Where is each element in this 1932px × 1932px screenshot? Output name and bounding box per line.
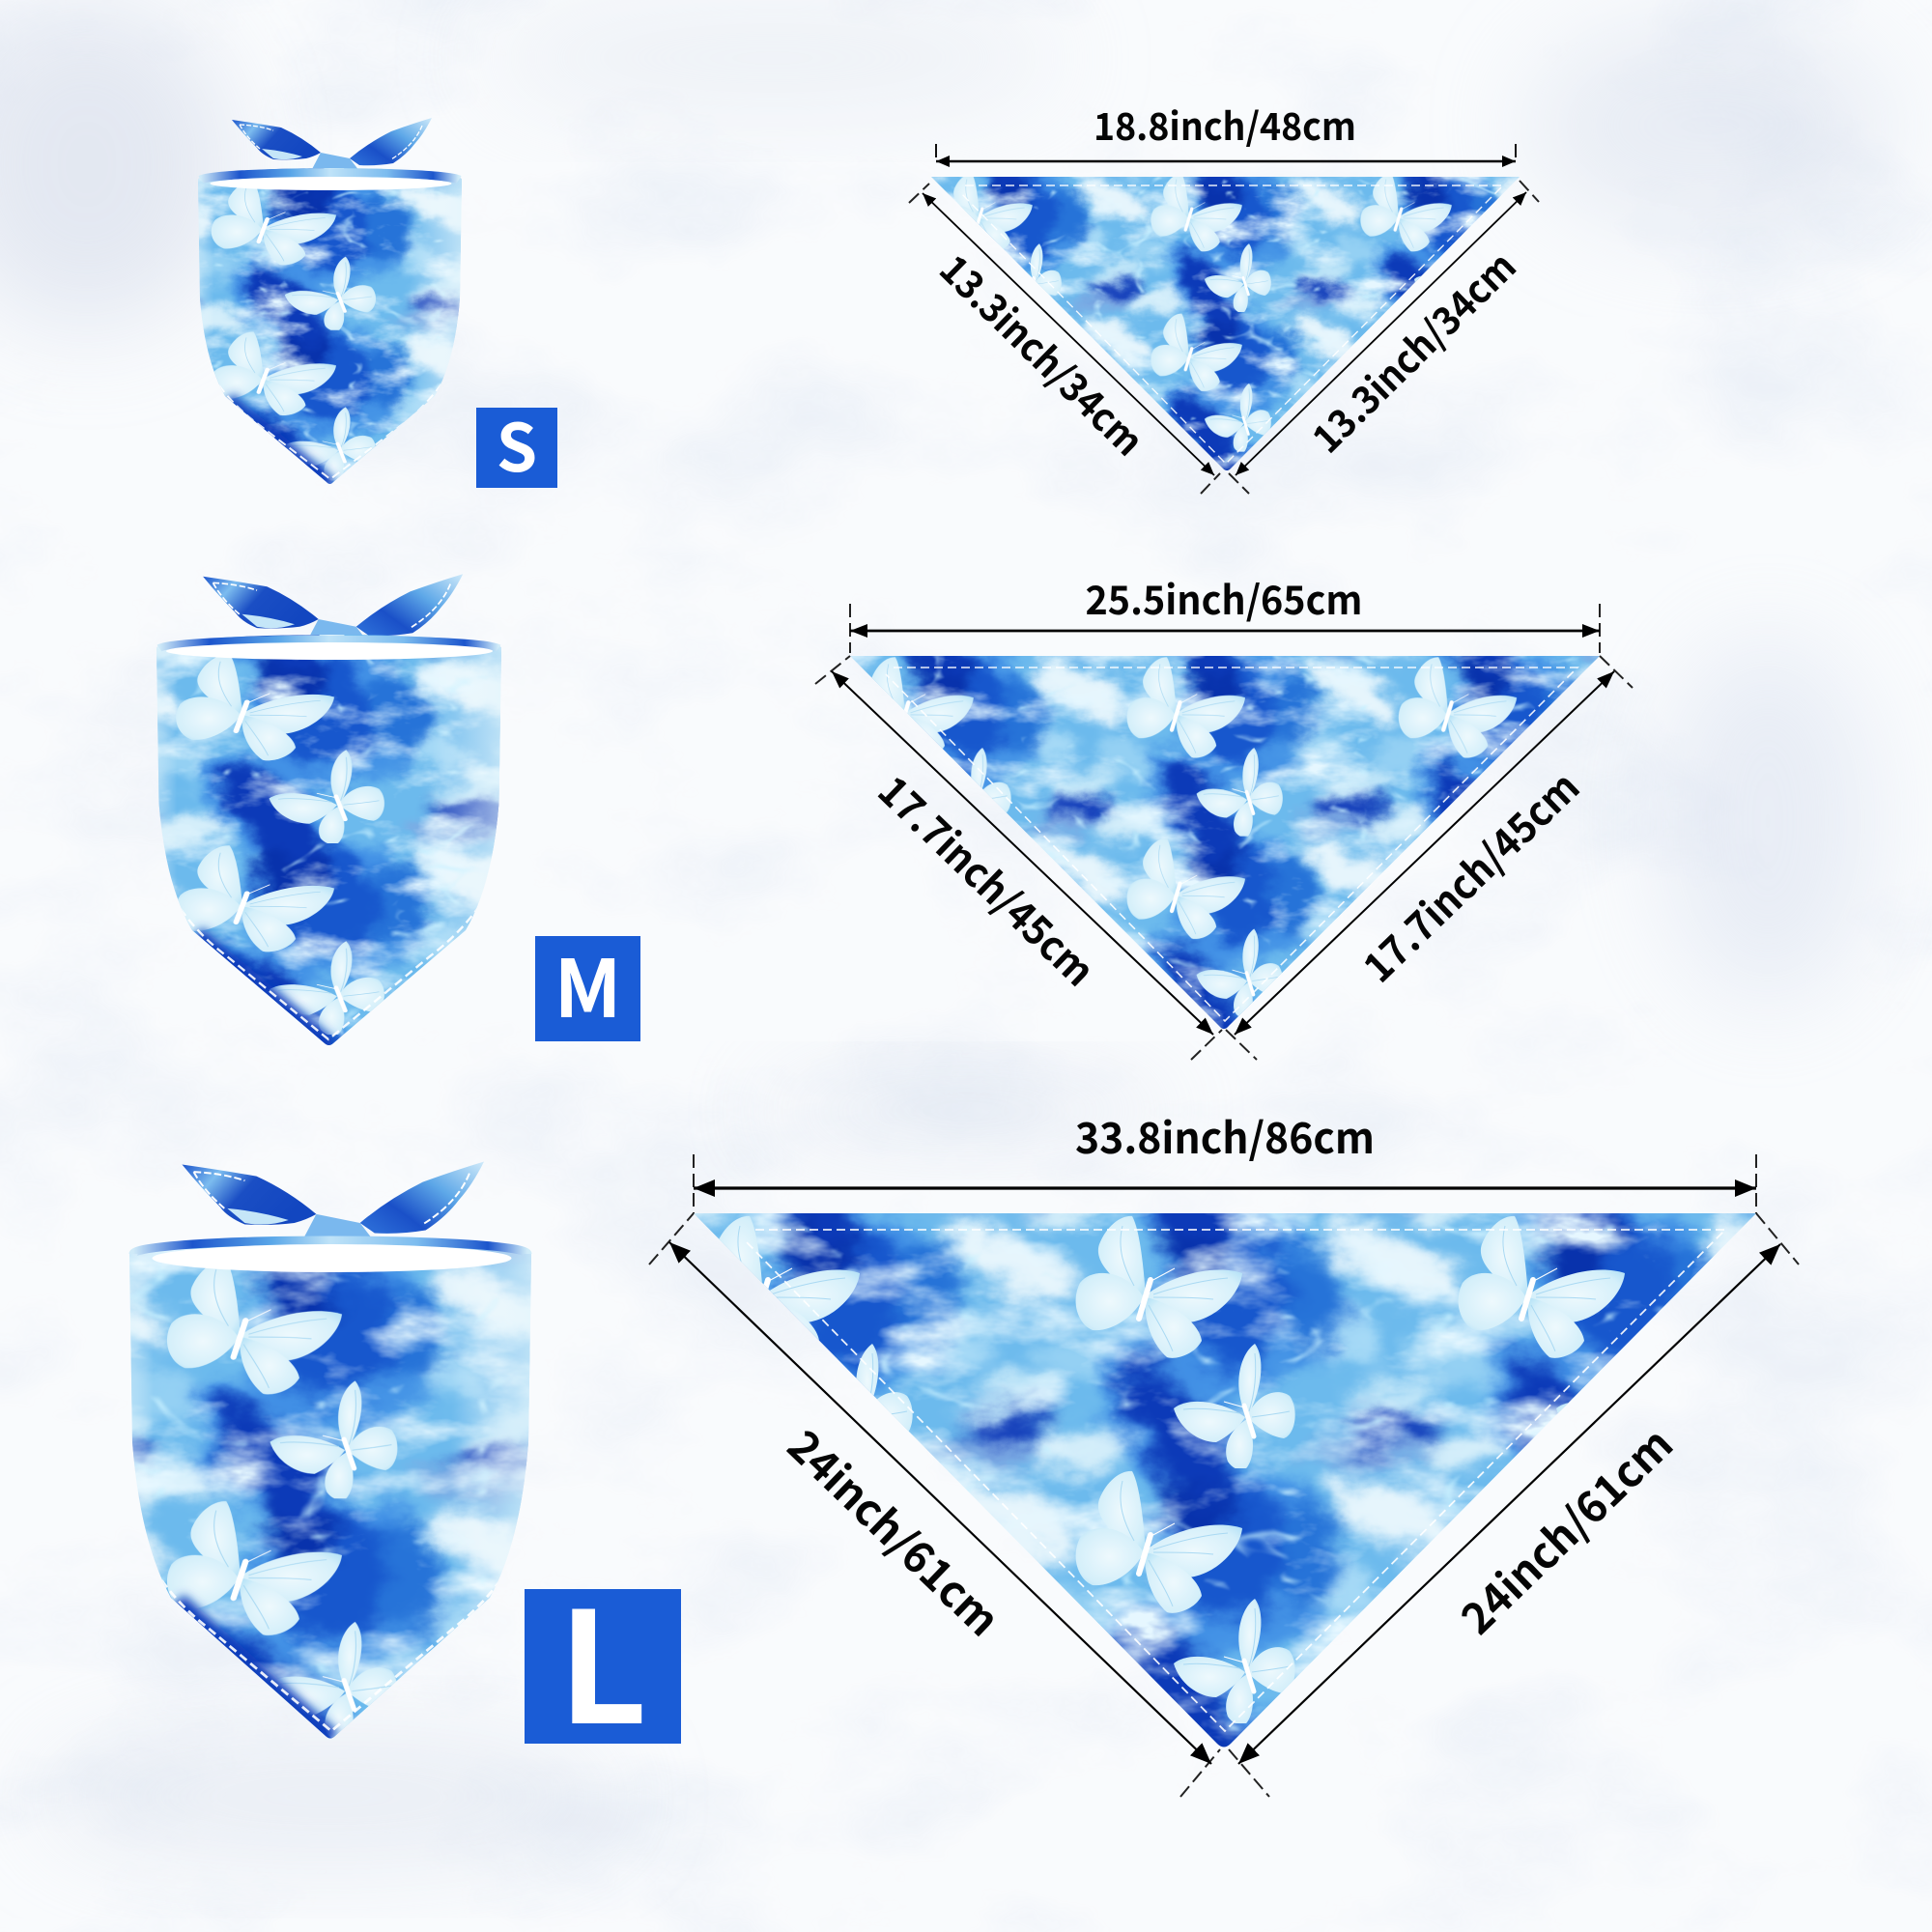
right side dimension S [1229, 181, 1539, 494]
flat triangle S [931, 177, 1520, 470]
badge L: L [558, 1545, 647, 1769]
left side dimension M: 17.7inch/45cm [867, 761, 1109, 998]
right side dimension S: 13.3inch/34cm [1297, 238, 1526, 464]
flat triangle M [850, 656, 1600, 1029]
left side dimension L [649, 1213, 1220, 1797]
badge S [476, 395, 557, 491]
right side dimension M [1226, 656, 1633, 1060]
panel: size M [156, 574, 1634, 1061]
knot S [232, 118, 432, 171]
right side dimension L [1229, 1213, 1799, 1797]
width dimension L: 33.8inch/86cm [1075, 1104, 1375, 1166]
panel: size S [198, 109, 1540, 495]
badge M [535, 925, 640, 1041]
width dimension M [850, 568, 1600, 653]
left side dimension S: 13.3inch/34cm [929, 241, 1158, 467]
right side dimension M: 17.7inch/45cm [1349, 757, 1591, 994]
bandana S worn front view [198, 118, 462, 484]
knot L [182, 1162, 484, 1242]
badge S: S [497, 395, 537, 491]
flat triangle L [694, 1213, 1756, 1747]
badge L [525, 1545, 681, 1769]
left side dimension M [815, 656, 1222, 1060]
left side dimension S [909, 184, 1220, 494]
bandana L worn front view [129, 1161, 531, 1739]
bandana M worn front view [156, 574, 501, 1045]
panel: size L [77, 1104, 1816, 1806]
left side dimension L: 24inch/61cm [776, 1413, 1015, 1648]
knot M [203, 574, 463, 643]
width dimension S [936, 98, 1516, 161]
width dimension S: 18.8inch/48cm [1094, 98, 1356, 152]
width dimension M: 25.5inch/65cm [1086, 568, 1362, 626]
width dimension L [694, 1104, 1756, 1213]
badge M: M [554, 925, 621, 1040]
right side dimension L: 24inch/61cm [1445, 1411, 1685, 1646]
